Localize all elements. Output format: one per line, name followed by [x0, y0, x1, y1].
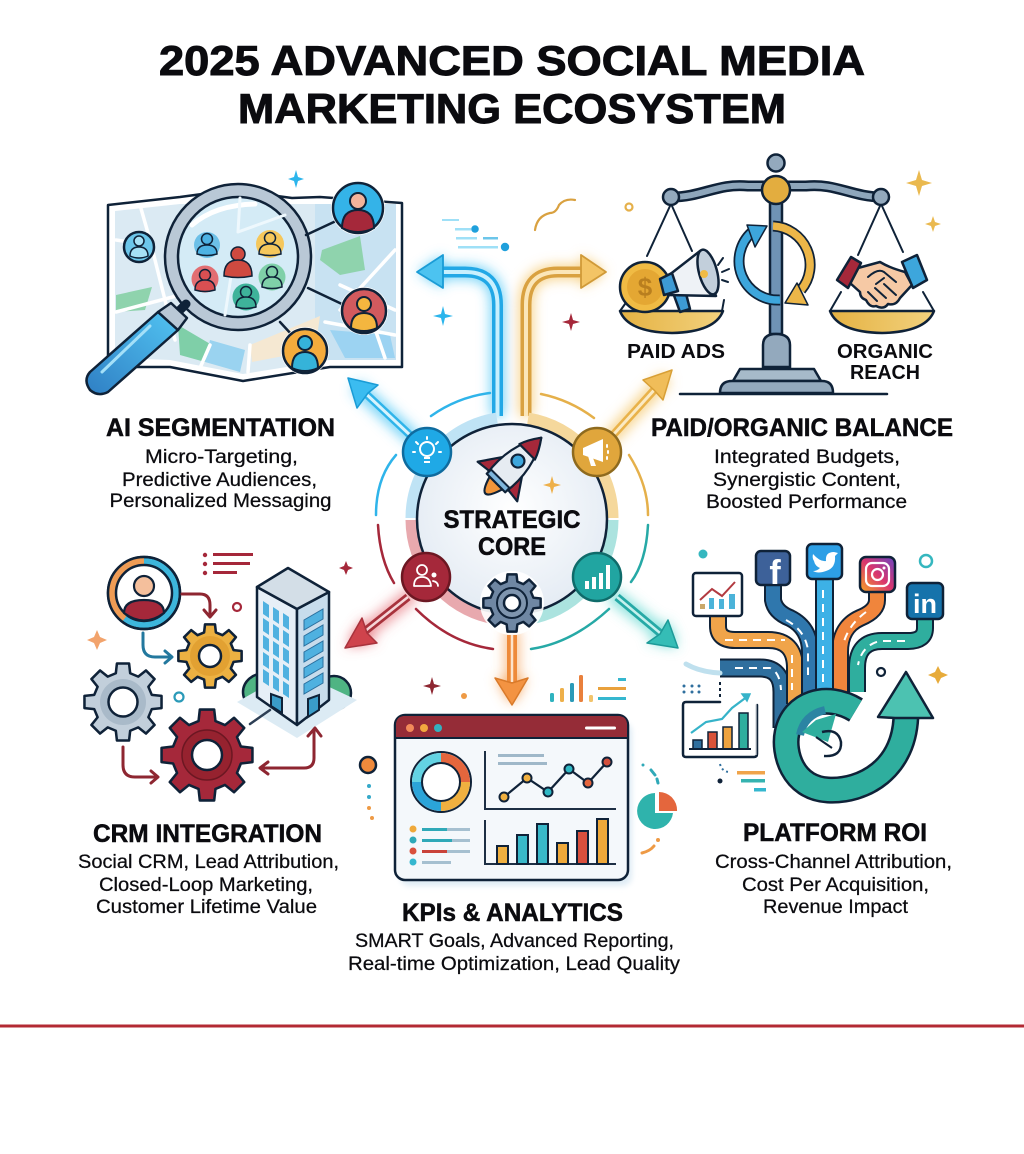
map pin avatars — [124, 181, 388, 375]
floating mini chart above dashboard — [423, 675, 626, 702]
heading and copy: AI segmentation: Micro-Targeting, — [145, 447, 298, 468]
magnifying glass — [86, 184, 311, 394]
heading and copy: paid/organic balance: Boosted Performance — [706, 492, 907, 513]
label: paid ads: PAID ADS — [627, 341, 725, 363]
heading and copy: platform ROI: Cross-Channel Attribution, — [715, 852, 952, 873]
sparkles — [433, 170, 941, 331]
arrow: to CRM integration — [345, 597, 408, 648]
heading and copy: AI segmentation — [106, 414, 335, 512]
heading and copy: platform ROI: Revenue Impact — [763, 897, 909, 918]
heading and copy: KPIs and analytics: SMART Goals, Advanced Reporting, — [355, 931, 674, 952]
heading and copy: CRM integration — [78, 820, 339, 918]
panel: paid/organic balance illustration — [433, 154, 941, 394]
cycle arrows — [739, 225, 810, 305]
customer avatar — [107, 557, 180, 629]
legend — [410, 826, 470, 866]
panel: AI segmentation illustration — [86, 170, 402, 394]
arrow: to platform ROI — [617, 597, 678, 648]
heading and copy: CRM integration: Social CRM, Lead Attribution, — [78, 852, 339, 873]
icon: instagram — [860, 557, 895, 592]
bar chart — [485, 819, 616, 864]
list icon — [203, 553, 253, 575]
arrow: core to AI segmentation (elbow) — [417, 255, 498, 416]
icon: megaphone — [660, 247, 729, 312]
sparkles and dots — [87, 561, 353, 702]
heading and copy: KPIs and analytics: Real-time Optimization, Lead Quality — [348, 954, 681, 975]
window frame — [395, 715, 632, 886]
heading and copy: AI segmentation: Predictive Audiences, — [122, 470, 317, 491]
heading and copy: CRM integration: CRM INTEGRATION — [93, 820, 322, 848]
node: lightbulb — [403, 428, 451, 476]
heading and copy: CRM integration: Customer Lifetime Value — [96, 897, 317, 918]
footer rule — [0, 1024, 1024, 1028]
heading: strategic core — [444, 506, 580, 561]
icon: linkedin — [907, 583, 943, 619]
heading and copy: AI segmentation: AI SEGMENTATION — [106, 414, 335, 442]
decorative dots — [682, 550, 948, 792]
heading and copy: platform ROI: PLATFORM ROI — [743, 819, 927, 847]
panel: strategic core hub — [376, 393, 648, 649]
audience icons inside lens — [192, 230, 286, 310]
arrow: to KPIs & analytics — [495, 635, 528, 705]
node: people — [402, 553, 450, 601]
node: megaphone — [573, 428, 621, 476]
icon: facebook — [756, 551, 790, 592]
glow halos behind connectors — [345, 255, 678, 705]
icon: trend card — [693, 573, 742, 616]
channel ribbons — [718, 578, 925, 728]
heading and copy: paid/organic balance — [651, 414, 953, 513]
heading and copy: AI segmentation: Personalized Messaging — [110, 491, 332, 512]
gears — [84, 624, 252, 800]
node with dotted line — [360, 757, 376, 820]
outer arc segments — [376, 393, 648, 649]
panel: platform ROI illustration — [682, 544, 948, 792]
heading and copy: KPIs and analytics — [348, 899, 681, 975]
heading: strategic core: CORE — [478, 533, 546, 561]
arrow: to AI segmentation (diagonal) — [348, 378, 410, 435]
arrow: to paid/organic balance (diagonal) — [614, 370, 672, 434]
pie accent — [637, 765, 677, 853]
icon: dollar coin — [620, 262, 670, 312]
panel: KPIs dashboard illustration — [360, 675, 677, 886]
title — [159, 37, 865, 132]
balance scale — [620, 154, 934, 394]
heading and copy: platform ROI — [715, 819, 952, 918]
node: bar chart — [573, 553, 621, 601]
speed lines — [442, 219, 509, 251]
line chart — [485, 751, 616, 809]
growth loop arrow — [786, 672, 933, 790]
heading: strategic core: STRATEGIC — [444, 506, 580, 534]
heading and copy: KPIs and analytics: KPIs & ANALYTICS — [402, 899, 623, 927]
small growth chart — [683, 694, 757, 757]
arrow: core to paid/organic (elbow) — [526, 255, 606, 416]
icon: central gear — [480, 571, 544, 635]
building — [237, 568, 357, 738]
heading and copy: paid/organic balance: Synergistic Content, — [713, 470, 901, 491]
label: organic reach: REACH — [850, 362, 920, 384]
icon: facebook: f — [769, 554, 781, 592]
workflow arrows — [123, 594, 321, 783]
label: organic reach — [837, 341, 933, 384]
icon: twitter — [807, 544, 842, 579]
heading and copy: CRM integration: Closed-Loop Marketing, — [99, 875, 313, 896]
icon: handshake — [837, 255, 927, 308]
panel: CRM integration illustration — [84, 553, 357, 800]
sparkle — [543, 476, 561, 494]
folded city map — [108, 190, 402, 381]
label: organic reach: ORGANIC — [837, 341, 933, 363]
donut chart — [411, 752, 471, 812]
title: 2025 ADVANCED SOCIAL MEDIA — [159, 37, 865, 84]
title: MARKETING ECOSYSTEM — [238, 85, 786, 132]
core disc with coloured ring — [412, 419, 612, 617]
sparkle — [288, 170, 304, 188]
heading and copy: paid/organic balance: PAID/ORGANIC BALANCE — [651, 414, 953, 442]
heading and copy: platform ROI: Cost Per Acquisition, — [742, 875, 929, 896]
icon: linkedin: in — [913, 589, 937, 619]
icon: dollar coin: $ — [638, 272, 653, 302]
heading and copy: paid/organic balance: Integrated Budgets, — [714, 447, 900, 468]
icon: rocket — [466, 418, 561, 513]
soft swoosh — [686, 664, 720, 673]
